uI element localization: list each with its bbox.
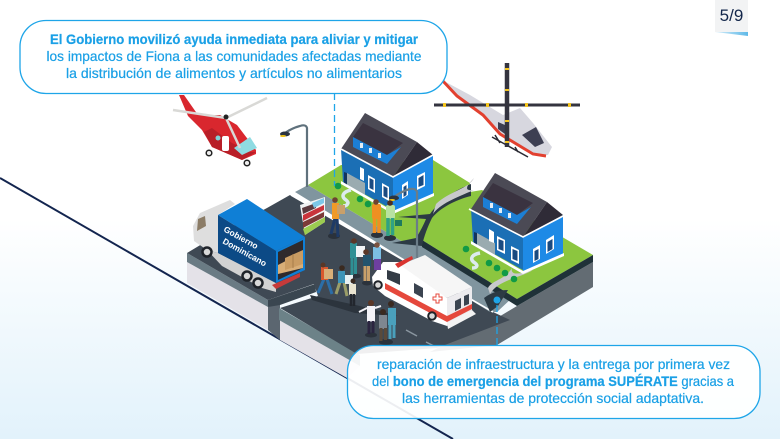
road crack <box>310 295 398 316</box>
people passing boxes <box>318 262 356 306</box>
bottom callout: reparación de infraestructura y la entrega por primera vez <box>377 356 730 372</box>
fuselage <box>442 80 552 155</box>
people group <box>318 197 402 345</box>
road <box>187 195 510 354</box>
truck tail <box>272 273 300 289</box>
doctor and patient <box>359 300 396 345</box>
sidewalk <box>295 185 513 312</box>
truck back <box>276 237 305 283</box>
grey helicopter <box>434 63 580 157</box>
garden paths and shrubs <box>335 183 517 282</box>
truck wheels <box>202 248 262 288</box>
top callout: la distribución de alimentos y artículos no alimentarios <box>66 65 402 81</box>
map pin and dashed connector bottom <box>494 296 500 346</box>
rotor <box>173 98 267 148</box>
street lamp left <box>280 125 307 187</box>
page number badge: 5/9 <box>720 6 743 25</box>
workers <box>371 199 402 241</box>
truck <box>193 199 305 292</box>
ambulance <box>372 255 476 329</box>
house left <box>341 113 434 214</box>
cargo boxes <box>278 252 303 274</box>
person carrying box <box>328 197 345 239</box>
bottom callout <box>348 346 760 418</box>
aid workers with boxes <box>349 238 381 286</box>
page number badge <box>715 0 748 36</box>
lawn right <box>422 190 593 306</box>
food shelf <box>300 197 325 235</box>
crack in the ground <box>392 178 533 312</box>
top callout: El Gobierno movilizó ayuda inmediata para aliviar y mitigar <box>50 31 419 47</box>
top callout <box>20 20 447 94</box>
fuselage <box>179 95 256 160</box>
truck label: Gobierno <box>222 224 260 251</box>
bottom callout: las herramientas de protección social adaptativa. <box>402 390 704 406</box>
truck cab <box>193 200 235 253</box>
isometric street scene <box>187 113 593 378</box>
road edge line <box>291 195 493 312</box>
platform walls <box>187 253 593 378</box>
truck box top <box>218 199 305 251</box>
skids <box>206 150 250 166</box>
house right <box>469 173 565 274</box>
bottom callout: del bono de emergencia del programa SUPÉRATE gracias a <box>372 373 734 389</box>
truck: Dominicano <box>221 236 268 268</box>
street lamp right <box>389 189 417 258</box>
lawn left <box>308 160 470 242</box>
top callout: los impactos de Fiona a las comunidades afectadas mediante <box>46 48 422 64</box>
diagonal line <box>0 178 453 439</box>
skids <box>492 135 528 157</box>
rotor <box>434 104 580 106</box>
truck box side <box>218 215 276 283</box>
red helicopter <box>173 95 267 166</box>
dashed connector top <box>334 93 336 186</box>
road markings <box>406 330 434 346</box>
